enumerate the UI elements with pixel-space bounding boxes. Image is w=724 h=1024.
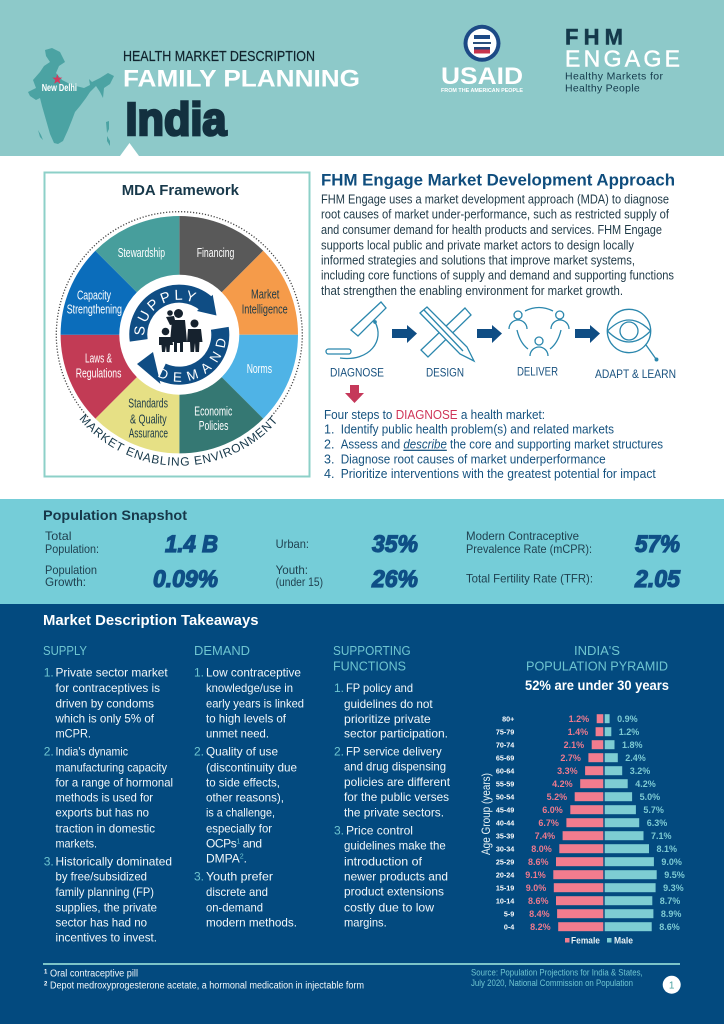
logo: FHM Engage: Healthy Markets for xyxy=(565,70,664,82)
logo: USAID: USAID xyxy=(441,63,523,90)
column: supply: for contraceptives is xyxy=(56,681,160,695)
age labels: 70-74 xyxy=(496,740,514,750)
wheel segment labels: Intelligence xyxy=(242,301,288,316)
column: demand: unmet need. xyxy=(206,727,269,741)
column: supply: for a range of hormonal xyxy=(56,776,173,790)
female values: 7.4% xyxy=(535,831,555,841)
stat: urban: Urban: xyxy=(276,537,309,551)
heading: population pyramid: INDIA'S xyxy=(574,643,620,658)
female values: 1.4% xyxy=(568,727,588,737)
icon: deliver people cycle xyxy=(509,308,569,356)
stat: mCPR: Prevalence Rate (mCPR): xyxy=(466,542,592,556)
stat: population growth xyxy=(45,563,218,593)
column: supply: SUPPLY xyxy=(43,643,87,658)
column: supply: which is only 5% of xyxy=(55,712,155,726)
female values: 4.2% xyxy=(552,779,573,789)
column: supply xyxy=(43,643,173,945)
wheel segments xyxy=(61,216,298,453)
column: supply: incentives to invest. xyxy=(56,931,157,945)
column: supply: by free/subsidized xyxy=(56,870,147,884)
heading: population pyramid xyxy=(525,643,669,693)
text block: approach description xyxy=(321,192,674,298)
male values: 9.0% xyxy=(661,857,682,867)
stat: youth: (under 15) xyxy=(276,575,323,589)
column: supporting functions: for the public verses xyxy=(344,790,449,804)
female values xyxy=(525,714,589,932)
logo: FHM Engage: ENGAGE xyxy=(565,46,680,72)
page number xyxy=(663,976,681,994)
stat: total fertility rate: 2.05 xyxy=(634,566,681,593)
column: supporting functions: Price control xyxy=(346,823,413,837)
column: supporting functions: 2. xyxy=(334,745,344,759)
wheel segment labels: Policies xyxy=(199,418,229,433)
column: supporting functions: costly due to low xyxy=(344,900,434,914)
column: supply: Private sector market xyxy=(56,666,168,680)
column: supply: markets. xyxy=(56,837,97,851)
column: demand: (discontinuity due xyxy=(206,761,297,775)
text block: approach description: root causes of market under-performance, such as restricted supply of xyxy=(321,208,669,222)
source note: July 2020, National Commission on Population xyxy=(471,978,633,988)
male values: 8.1% xyxy=(656,844,677,854)
male values: 1.2% xyxy=(619,727,639,737)
panel: market development approach xyxy=(321,171,675,298)
male values: 1.8% xyxy=(622,740,643,750)
step labels: DELIVER xyxy=(517,367,558,379)
column: supporting functions xyxy=(333,643,451,930)
step labels xyxy=(330,367,676,381)
wheel segment labels: Strengthening xyxy=(67,301,122,316)
heading: population pyramid: POPULATION PYRAMID xyxy=(526,659,668,674)
text block: approach description: FHM Engage uses a market development approach (MDA) to diagnose xyxy=(321,192,669,206)
column: supporting functions: sector participation. xyxy=(344,727,448,741)
arrow: deliver to adapt xyxy=(575,325,600,343)
wheel segment labels: Economic xyxy=(194,404,233,419)
footnotes: 1 xyxy=(44,970,48,976)
column: demand: . xyxy=(244,852,247,866)
female values: 2.1% xyxy=(564,740,584,750)
column: supporting functions: and drug dispensing xyxy=(344,760,446,774)
wheel segment labels: Regulations xyxy=(76,366,122,381)
text block: approach description: including core functions of supply and demand and supporting functions xyxy=(321,269,674,283)
column: supporting functions: product extensions xyxy=(344,885,444,899)
column: demand: is a challenge, xyxy=(206,806,275,820)
supply and demand ring: DEMAND xyxy=(158,338,226,382)
column: demand xyxy=(194,643,304,930)
arrow: diagnose to design xyxy=(392,325,417,343)
stat: population growth: Population xyxy=(45,563,97,577)
stat: youth: 26% xyxy=(371,566,418,593)
column: demand: Quality of use xyxy=(206,745,278,759)
title block: India xyxy=(126,93,227,145)
female values: 8.0% xyxy=(531,844,552,854)
stat: total population: Population: xyxy=(45,542,99,556)
legend: Female xyxy=(571,936,600,946)
column: demand: DEMAND xyxy=(194,643,250,658)
text block: four steps: 2. xyxy=(324,438,334,452)
stat: population growth: Growth: xyxy=(45,575,86,589)
page number: 1 xyxy=(669,980,675,992)
text block: approach description: that strengthen the enabling environment for market growth. xyxy=(321,284,623,298)
column: supply: 3. xyxy=(44,855,54,869)
axis title: Age Group (years) xyxy=(479,773,493,855)
column: supply: exports but has no xyxy=(56,806,149,820)
male values: 2.4% xyxy=(625,753,646,763)
heading: population snapshot: Population Snapshot xyxy=(43,507,187,523)
column: supporting functions: guidelines do not xyxy=(344,697,433,711)
wheel segment labels: Laws & xyxy=(85,351,112,366)
heading: takeaways: Market Description Takeaways xyxy=(43,613,258,629)
column: supporting functions: FP policy and xyxy=(346,681,413,695)
column: supporting functions: margins. xyxy=(344,916,387,930)
text block: four steps: Prioritize interventions with the greatest potential for impact xyxy=(341,467,656,481)
logo: USAID xyxy=(441,25,523,94)
column: demand: 2 xyxy=(240,854,244,861)
column: demand: especially for xyxy=(206,821,272,835)
text block: four steps: 4. xyxy=(324,467,334,481)
female values: 6.0% xyxy=(542,805,563,815)
male values: 9.5% xyxy=(664,870,685,880)
panel: market description takeaways xyxy=(0,604,724,1024)
step labels: DIAGNOSE xyxy=(330,368,384,380)
stat: population growth: 0.09% xyxy=(153,566,218,593)
header band xyxy=(0,0,724,156)
footnotes: 2 xyxy=(44,982,48,988)
male values: 3.2% xyxy=(630,766,650,776)
logo: FHM Engage: Healthy People xyxy=(565,82,640,94)
female values: 6.7% xyxy=(538,818,559,828)
title block: FAMILY PLANNING xyxy=(123,66,360,93)
column: demand: to side effects, xyxy=(206,776,280,790)
stat: youth xyxy=(276,563,418,593)
age labels: 25-29 xyxy=(496,858,514,866)
column: supply: traction in domestic xyxy=(56,821,155,835)
icon: diagnose microscope xyxy=(326,302,386,358)
wheel segment labels: Standards xyxy=(128,396,168,411)
step labels: ADAPT & LEARN xyxy=(595,369,676,381)
female values: 8.2% xyxy=(530,922,551,932)
male values: 9.3% xyxy=(663,883,684,893)
male values: 7.1% xyxy=(651,831,672,841)
supply and demand ring xyxy=(119,274,240,395)
logo: FHM Engage: FHM xyxy=(565,24,623,49)
male values: 5.0% xyxy=(640,792,660,802)
age labels: 80+ xyxy=(502,714,514,724)
wheel segment labels: Assurance xyxy=(129,425,168,440)
text block: four steps xyxy=(324,408,663,481)
female values: 8.6% xyxy=(528,896,548,906)
heading: MDA Framework: MDA Framework xyxy=(122,182,240,199)
column: demand: OCPs xyxy=(206,837,237,851)
column: supporting functions: FUNCTIONS xyxy=(333,659,406,674)
dotted ring xyxy=(56,212,302,417)
heading: population pyramid: 52% are under 30 years xyxy=(525,678,669,693)
column: supporting functions: the private sectors. xyxy=(344,806,444,820)
stat: total fertility rate: Total Fertility Rate (TFR): xyxy=(466,572,593,586)
column: demand: knowledge/use in xyxy=(206,681,293,695)
legend: Male xyxy=(614,936,633,946)
logo: FHM Engage xyxy=(565,24,680,94)
wheel segment labels: Stewardship xyxy=(118,245,165,260)
icon: design pencil and ruler xyxy=(420,307,474,361)
age labels: 50-54 xyxy=(496,792,514,802)
age labels: 75-79 xyxy=(496,728,514,736)
column: supply: driven by condoms xyxy=(56,697,154,711)
column: demand: on-demand xyxy=(206,901,263,915)
column: demand: other reasons), xyxy=(206,790,284,804)
panel: MDA framework xyxy=(44,172,310,478)
wheel segment labels: Market xyxy=(251,286,280,301)
female values: 9.1% xyxy=(525,870,546,880)
legend xyxy=(565,936,633,946)
footnotes: Depot medroxyprogesterone acetate, a hormonal medication in injectable form xyxy=(50,981,364,992)
column: supply: 2. xyxy=(44,745,54,759)
age labels: 20-24 xyxy=(496,870,514,880)
age labels: 45-49 xyxy=(496,806,514,814)
age labels: 55-59 xyxy=(496,780,514,788)
footnotes xyxy=(44,969,364,992)
title block: HEALTH MARKET DESCRIPTION xyxy=(123,48,315,65)
source note xyxy=(471,968,643,988)
female values: 3.3% xyxy=(557,766,578,776)
column: supporting functions: FP service delivery xyxy=(346,745,442,759)
wheel segment labels xyxy=(67,245,288,440)
stat: total population: 1.4 B xyxy=(165,531,218,558)
footnotes: Oral contraceptive pill xyxy=(50,969,138,980)
column: demand: to high levels of xyxy=(206,712,287,726)
text block: four steps: Assess and describe the core and supporting market structures xyxy=(341,438,663,452)
male values: 8.6% xyxy=(659,922,680,932)
male values: 6.3% xyxy=(647,818,667,828)
age labels: 0-4 xyxy=(504,922,514,932)
column: supply: India's dynamic xyxy=(56,745,128,759)
stat: mCPR xyxy=(466,529,680,558)
age labels xyxy=(496,714,514,932)
female values: 9.0% xyxy=(526,883,546,893)
text block: approach description: informed strategies and solutions that improve market systems, xyxy=(321,253,635,267)
panel: population snapshot xyxy=(0,499,724,604)
icon: adapt and learn eye xyxy=(607,309,658,361)
icon: family xyxy=(159,309,202,352)
arrow: design to deliver xyxy=(477,325,502,343)
column: demand: Low contraceptive xyxy=(206,666,301,680)
column: supporting functions: policies are different xyxy=(344,775,451,789)
stat: youth: Youth: xyxy=(276,563,308,577)
icon: India map with New Delhi: New Delhi xyxy=(42,83,77,94)
text block: approach description: supports local public and private market actors to design locally xyxy=(321,238,635,252)
text block: four steps: 3. xyxy=(324,452,334,466)
column: demand: Youth prefer xyxy=(206,869,273,883)
female values: 8.4% xyxy=(529,909,550,919)
male values: 5.7% xyxy=(643,805,664,815)
text block: four steps: 1. xyxy=(324,423,334,437)
text block: approach description: and consumer demand for health products and services. FHM Engage xyxy=(321,223,662,237)
column: supporting functions: newer products and xyxy=(344,869,448,883)
column: supporting functions: SUPPORTING xyxy=(333,643,411,658)
column: supply: methods is used for xyxy=(56,790,153,804)
age labels: 30-34 xyxy=(496,844,514,854)
stat: total population xyxy=(45,529,218,558)
step labels: DESIGN xyxy=(426,368,464,380)
stat: urban xyxy=(276,531,418,558)
arrow: down to diagnose steps xyxy=(345,385,364,403)
age labels: 40-44 xyxy=(496,818,514,828)
age labels: 60-64 xyxy=(496,766,514,776)
column: demand: modern methods. xyxy=(206,916,297,930)
column: supporting functions: introduction of xyxy=(344,854,423,868)
female values: 2.7% xyxy=(560,753,581,763)
male values xyxy=(617,714,685,932)
male values: 0.9% xyxy=(617,714,638,724)
heading: approach: FHM Engage Market Development Approach xyxy=(321,171,675,190)
column: supply: 1. xyxy=(44,666,54,680)
column: supporting functions: 1. xyxy=(334,681,344,695)
column: demand: DMPA xyxy=(206,852,240,866)
female bars xyxy=(553,714,603,931)
column: supply: supplies, the private xyxy=(56,901,157,915)
male bars xyxy=(605,714,657,931)
stat: total fertility rate xyxy=(466,566,681,593)
stat: mCPR: Modern Contraceptive xyxy=(466,529,579,543)
stat: mCPR: 57% xyxy=(635,531,680,558)
column: supporting functions: guidelines make the xyxy=(344,838,446,852)
age labels: 15-19 xyxy=(496,884,514,892)
column: supply: manufacturing capacity xyxy=(56,761,167,775)
column: demand: discrete and xyxy=(206,885,268,899)
curved caption: market enabling environment: MARKET ENABLING ENVIRONMENT xyxy=(80,414,276,466)
female values: 8.6% xyxy=(528,857,548,867)
column: demand: 3. xyxy=(194,869,204,883)
age labels: 35-39 xyxy=(496,832,514,840)
male values: 8.7% xyxy=(660,896,680,906)
male values: 4.2% xyxy=(635,779,656,789)
column: demand: early years is linked xyxy=(206,697,304,711)
wheel segment labels: Capacity xyxy=(77,287,111,302)
female values: 1.2% xyxy=(569,714,589,724)
column: demand: 1. xyxy=(194,666,204,680)
wheel segment labels: Norms xyxy=(247,361,272,376)
source note: Source: Population Projections for India & States, xyxy=(471,968,643,978)
text block: four steps: Diagnose root causes of market underperformance xyxy=(341,452,606,466)
icon: India map with New Delhi xyxy=(28,48,114,146)
column: supply: family planning (FP) xyxy=(56,885,154,899)
text block: four steps: Four steps to DIAGNOSE a health market: xyxy=(324,408,545,422)
female values: 5.2% xyxy=(547,792,567,802)
wheel segment labels: & Quality xyxy=(130,411,167,426)
column: supply: mCPR. xyxy=(56,727,91,741)
wheel segment labels: Financing xyxy=(197,245,234,260)
column: demand: 1 xyxy=(236,839,240,846)
column: supply: Historically dominated xyxy=(56,855,172,869)
stat: urban: 35% xyxy=(372,531,418,558)
age labels: 5-9 xyxy=(504,910,514,918)
column: supply: sector has had no xyxy=(56,916,147,930)
age labels: 65-69 xyxy=(496,754,514,762)
column: supporting functions: 3. xyxy=(334,823,344,837)
age labels: 10-14 xyxy=(496,896,514,906)
stat: total population: Total xyxy=(45,529,72,543)
column: demand: 2. xyxy=(194,745,204,759)
column: demand: and xyxy=(240,837,262,851)
male values: 8.9% xyxy=(661,909,681,919)
supply and demand ring: SUPPLY xyxy=(134,290,196,336)
column: supporting functions: prioritize private xyxy=(344,712,431,726)
chart: population pyramid xyxy=(479,714,685,946)
logo: USAID: FROM THE AMERICAN PEOPLE xyxy=(441,88,523,94)
text block: four steps: Identify public health problem(s) and related markets xyxy=(341,423,614,437)
title block xyxy=(123,48,360,145)
